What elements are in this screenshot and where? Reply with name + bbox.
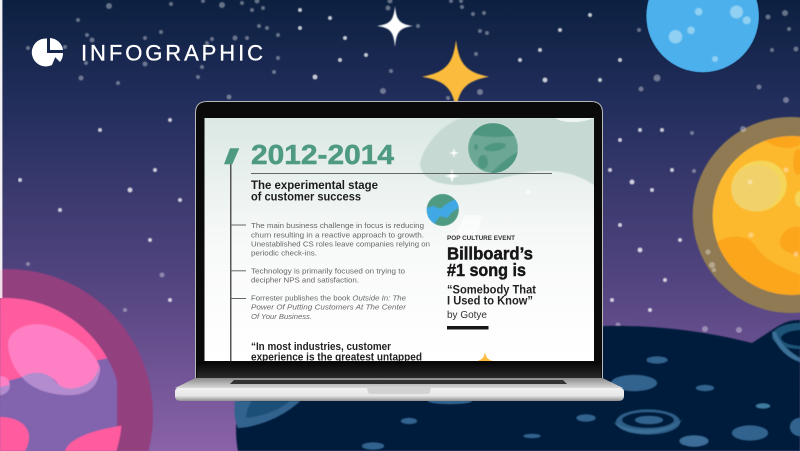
body text: Forrester publishes the book Outside In: The xyxy=(251,294,406,302)
green blob xyxy=(420,118,594,185)
faint parallelogram xyxy=(455,215,483,236)
body text: Technology is primarily focused on trying to xyxy=(251,266,405,276)
laptop base xyxy=(175,388,624,401)
body text: Of Your Business. xyxy=(251,312,312,321)
craters xyxy=(234,356,800,450)
star field xyxy=(18,0,798,333)
planet: pink xyxy=(0,269,153,451)
quote: “In most industries, customer xyxy=(251,341,392,353)
logo xyxy=(32,38,263,66)
body text xyxy=(251,221,430,321)
planet: earth xyxy=(426,194,460,226)
laptop deck xyxy=(175,378,623,388)
icon: pie chart xyxy=(32,38,63,66)
quote xyxy=(251,342,422,361)
planet: yellow xyxy=(693,117,800,313)
pop culture event: by Gotye xyxy=(447,310,487,321)
white wave xyxy=(555,118,594,122)
quote: experience is the greatest untapped xyxy=(251,352,422,364)
body text: Unestablished CS roles leave companies relying on xyxy=(251,240,430,248)
moon surface xyxy=(234,320,800,451)
body text: Power Of Putting Customers At The Center xyxy=(251,303,407,312)
subheading: The experimental stage xyxy=(251,178,378,192)
subheading xyxy=(251,180,378,200)
pop culture event: POP CULTURE EVENT xyxy=(447,235,515,242)
timeline xyxy=(224,148,246,362)
left edge strip xyxy=(0,0,2,298)
subheading: of customer success xyxy=(251,190,361,204)
top-right ring crater xyxy=(772,323,800,362)
heading rule xyxy=(251,173,552,174)
laptop lid xyxy=(196,102,602,379)
body text: periodic check-ins. xyxy=(251,249,317,258)
icon: yellow sparkle xyxy=(422,40,489,110)
body text: churn resulting in a reactive approach to growth. xyxy=(251,230,424,239)
heading: years: 2012-2014 xyxy=(251,139,394,170)
icon: white sparkle xyxy=(377,6,413,47)
sparkles on screen xyxy=(445,148,532,196)
planet: green xyxy=(468,123,519,175)
laptop xyxy=(175,102,624,401)
logo wordmark: INFOGRAPHIC xyxy=(81,41,263,66)
icon: yellow star on screen xyxy=(478,352,492,361)
laptop screen xyxy=(204,118,594,364)
planet: blue xyxy=(646,0,759,72)
keyboard xyxy=(230,380,567,384)
pop culture event xyxy=(447,235,536,330)
pop culture event: #1 song is xyxy=(447,260,526,280)
laptop notch xyxy=(367,388,431,394)
body text: The main business challenge in focus is reducing xyxy=(251,221,424,230)
pop culture event: “Somebody That xyxy=(447,284,536,296)
pop culture event: Billboard’s xyxy=(447,244,533,264)
ring crater xyxy=(614,410,684,434)
body text: decipher NPS and satisfaction. xyxy=(251,276,359,285)
laptop chin xyxy=(197,362,601,378)
pop culture event: I Used to Know” xyxy=(447,296,533,308)
